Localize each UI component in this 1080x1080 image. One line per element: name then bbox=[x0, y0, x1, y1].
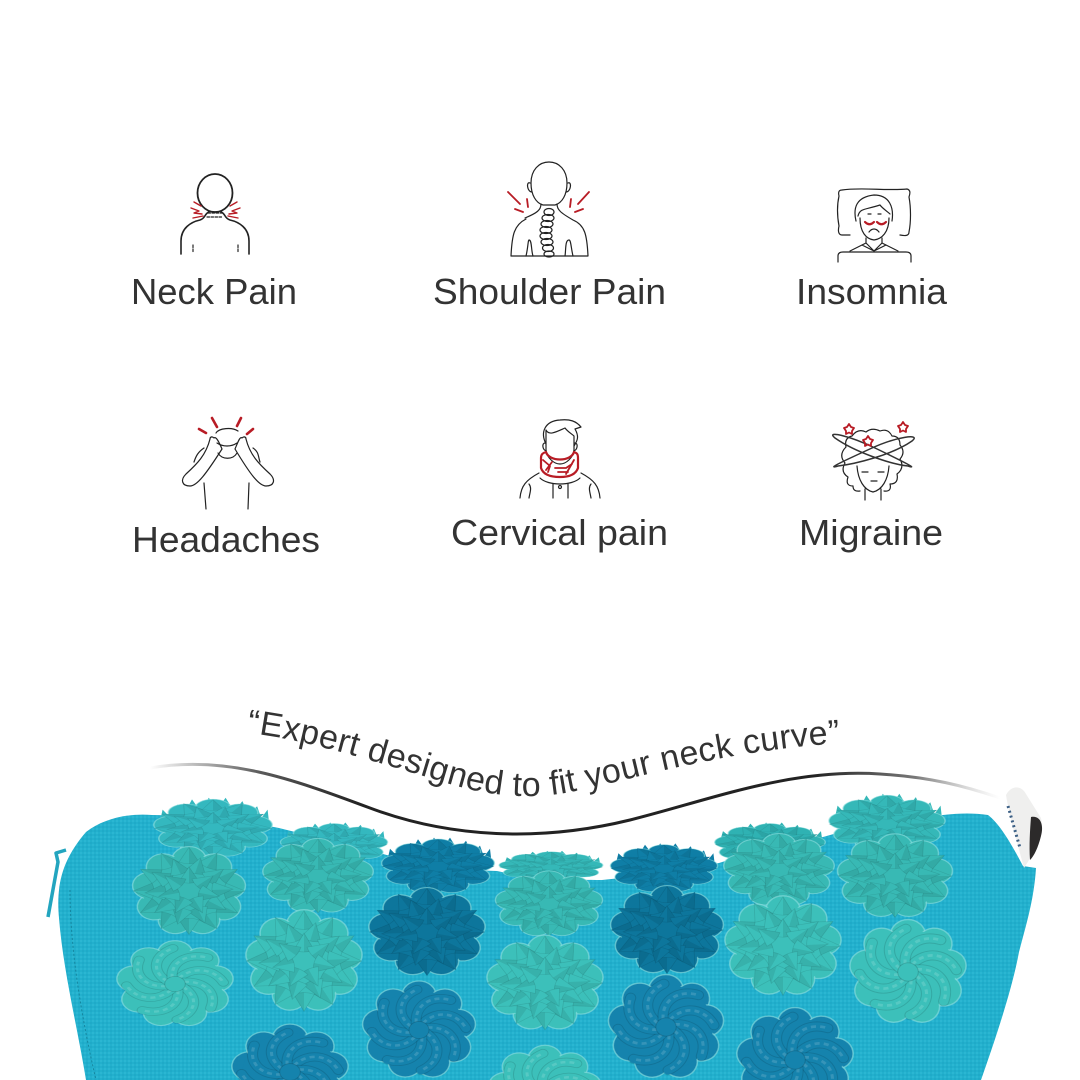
nodes: third row bbox=[114, 896, 969, 1033]
panel: condition icons bbox=[131, 162, 948, 560]
label: Migraine: Migraine bbox=[799, 512, 943, 553]
seam bbox=[70, 890, 96, 1080]
nodes: front row bbox=[229, 975, 856, 1080]
icon: neck pain bbox=[181, 174, 249, 254]
label: Cervical pain: Cervical pain bbox=[451, 512, 668, 553]
curved tagline: “Expert designed to fit your neck curve” bbox=[250, 710, 838, 796]
icon: shoulder pain bbox=[508, 162, 589, 257]
icon: migraine bbox=[833, 422, 914, 500]
label: Shoulder Pain: Shoulder Pain bbox=[433, 271, 666, 312]
icon: insomnia bbox=[838, 189, 911, 262]
panel: acupressure pillow bbox=[48, 787, 1042, 1080]
icon: cervical collar bbox=[520, 420, 600, 498]
pillow body bbox=[58, 814, 1036, 1080]
label: Neck Pain: Neck Pain bbox=[131, 271, 297, 312]
icon: headaches bbox=[183, 418, 273, 509]
tag bbox=[1006, 787, 1042, 868]
label: Headaches: Headaches bbox=[132, 519, 320, 560]
zipper bbox=[48, 850, 66, 917]
nodes: back row bbox=[151, 794, 948, 895]
nodes: second row bbox=[130, 834, 955, 978]
curve line bbox=[150, 764, 1000, 834]
label: Insomnia: Insomnia bbox=[796, 271, 948, 312]
